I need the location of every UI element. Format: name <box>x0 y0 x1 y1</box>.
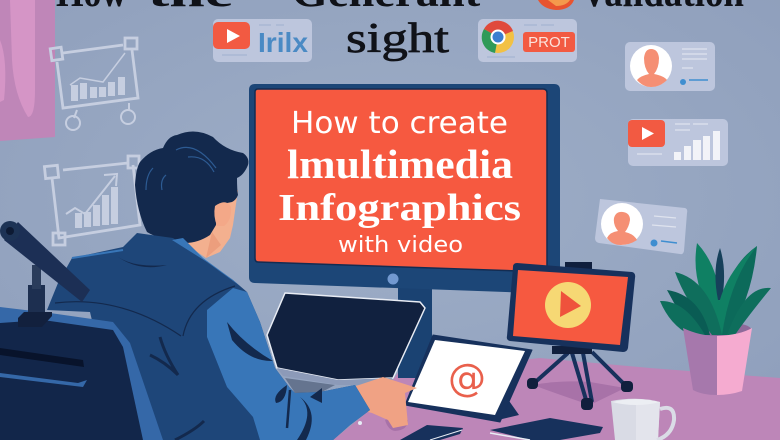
coffee mug <box>611 399 674 440</box>
monitor <box>249 84 560 378</box>
profile card bottom <box>595 199 687 254</box>
screen text: with video <box>338 233 463 258</box>
screen text: Infographics <box>278 187 521 229</box>
title second line: sight <box>346 16 449 62</box>
phone on desk <box>400 425 463 440</box>
potted plant <box>660 243 771 395</box>
notebook on desk <box>490 418 603 440</box>
tablet: @ <box>448 356 486 400</box>
chair <box>0 307 163 440</box>
desk <box>333 358 780 440</box>
person head <box>135 131 248 258</box>
wall poster <box>0 0 55 141</box>
screen text: lmultimedia <box>287 141 513 187</box>
microphone <box>0 221 90 327</box>
sketch chart upper <box>50 38 138 130</box>
screen text: How to create <box>291 106 508 141</box>
badge: video Irilx <box>213 19 312 62</box>
tripod camera <box>507 262 635 410</box>
title icon <box>538 0 574 10</box>
profile card top <box>625 42 715 91</box>
hand <box>350 377 417 431</box>
main title <box>56 0 744 15</box>
laptop <box>267 293 425 393</box>
badge: video Irilx: Irilx <box>258 27 308 58</box>
person jacket <box>47 233 370 440</box>
screen text <box>278 106 521 258</box>
video stats card <box>628 119 728 166</box>
badge: chrome PROT <box>478 19 577 62</box>
badge: chrome PROT: PROT <box>528 34 570 51</box>
tablet <box>405 335 532 422</box>
sketch chart lower <box>44 156 140 245</box>
